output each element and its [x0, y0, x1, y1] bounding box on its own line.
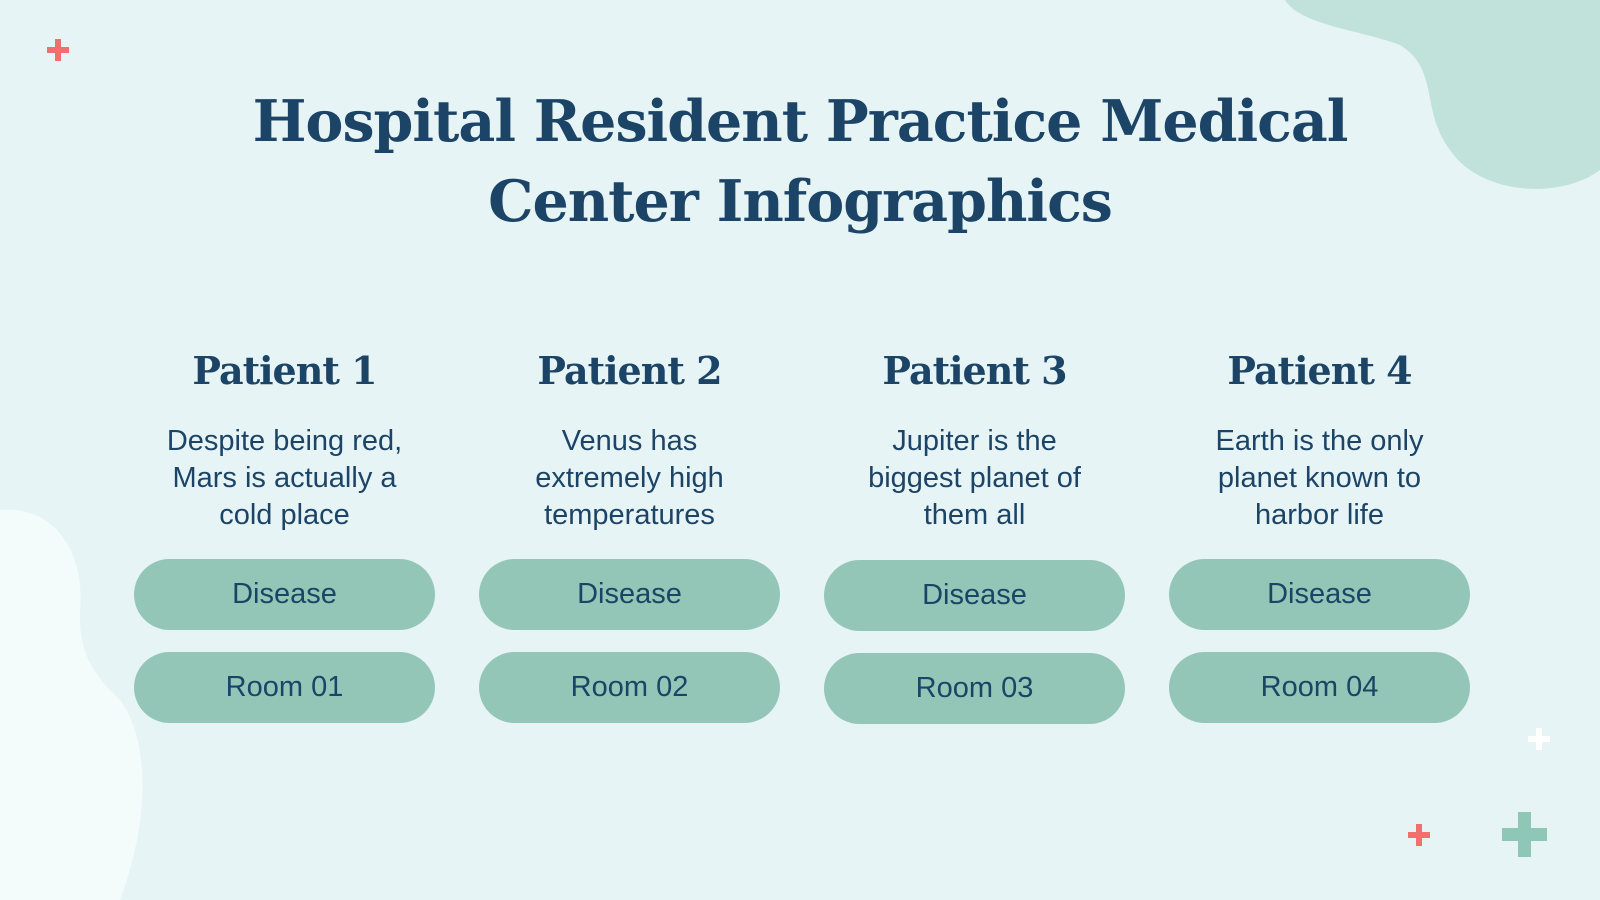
- pill: room: Room 04: [1261, 671, 1378, 703]
- text block: [535, 425, 724, 531]
- text block: biggest planet of: [868, 462, 1081, 494]
- title: Hospital Resident Practice Medical: [253, 88, 1347, 155]
- heading: Patient 3: [882, 348, 1067, 393]
- pill: disease: [1169, 559, 1470, 630]
- text block: [1216, 425, 1424, 531]
- pill: room: Room 02: [571, 671, 688, 703]
- text block: [167, 425, 402, 531]
- text block: [868, 425, 1081, 531]
- title: Center Infographics: [488, 168, 1112, 235]
- text block: harbor life: [1255, 499, 1384, 531]
- heading: Patient 4: [1227, 348, 1412, 393]
- panel: patient 2: [479, 348, 780, 723]
- pill: room: [134, 652, 435, 723]
- pill: disease: Disease: [922, 579, 1027, 611]
- pill: disease: [134, 559, 435, 630]
- pill: disease: Disease: [577, 578, 682, 610]
- text block: Mars is actually a: [172, 462, 396, 494]
- pill: room: [1169, 652, 1470, 723]
- heading: Patient 2: [537, 348, 722, 393]
- text block: them all: [924, 499, 1025, 531]
- text block: Despite being red,: [167, 425, 402, 457]
- text block: temperatures: [544, 499, 715, 531]
- icon: green cross bottom: [1502, 812, 1547, 857]
- heading: Patient 1: [192, 348, 377, 393]
- pill: disease: Disease: [1267, 578, 1372, 610]
- panel: patient 1: [134, 348, 435, 723]
- text block: cold place: [219, 499, 350, 531]
- pill: disease: [824, 560, 1125, 631]
- text block: Jupiter is the: [892, 425, 1057, 457]
- text block: extremely high: [535, 462, 724, 494]
- text block: Earth is the only: [1216, 425, 1423, 457]
- pill: disease: Disease: [232, 578, 337, 610]
- pill: room: [824, 653, 1125, 724]
- pill: disease: [479, 559, 780, 630]
- title: [253, 88, 1347, 235]
- text block: Venus has: [562, 425, 697, 457]
- pill: room: Room 03: [916, 672, 1033, 704]
- panel: patient 3: [824, 348, 1125, 724]
- pill: room: Room 01: [226, 671, 343, 703]
- icon: red cross top-left: [47, 39, 69, 61]
- icon: white cross: [1528, 728, 1550, 750]
- icon: red cross bottom: [1408, 824, 1430, 846]
- text block: planet known to: [1218, 462, 1421, 494]
- panel: patient 4: [1169, 348, 1470, 723]
- pill: room: [479, 652, 780, 723]
